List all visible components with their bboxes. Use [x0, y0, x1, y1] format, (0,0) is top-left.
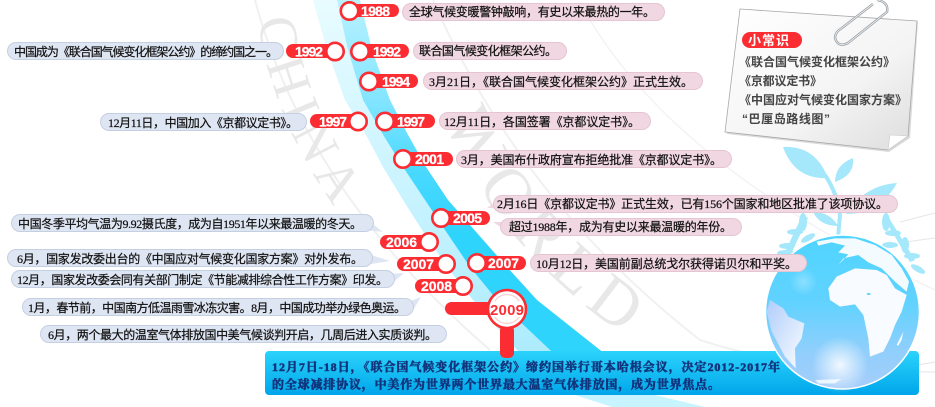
year marker: 2007 left: [397, 255, 455, 273]
callout: 2005 Kyoto in force: 2月16日《京都议定书》正式生效，已有156个国家和地区批准了该项协议。: [497, 196, 888, 211]
callout: 2005 warmest year: 超过1988年，成为有史以来最温暖的年份。: [509, 219, 732, 234]
callout: 1988 event: 全球气候变暖警钟敲响，有史以来最热的一年。: [409, 4, 655, 19]
year marker: 1997 right: [376, 113, 435, 130]
year marker: 2005: [432, 209, 490, 227]
year marker: 1988: 1988: [361, 3, 390, 19]
year marker: 2001: 2001: [415, 151, 444, 167]
callout: 2008 events: 1月，春节前，中国南方低温雨雪冰冻灾害。8月，中国成功举办绿色奥运。: [28, 300, 406, 315]
year marker: 1994: 1994: [382, 74, 410, 90]
callout: 2007 work plan: 12月，国家发改委会同有关部门制定《节能减排综合性工作方案》印发。: [17, 272, 388, 287]
callout: 2009 talks: 6月，两个最大的温室气体排放国中美气候谈判开启，几周后进入实质谈判。: [48, 327, 437, 342]
callout: 1992 world event: 联合国气候变化框架公约。: [419, 43, 557, 58]
panel: note card: [725, 0, 918, 152]
background watermark: China World: WORLD: [451, 101, 638, 326]
year marker: 1988: [341, 2, 399, 20]
timeline curved band: [313, 0, 705, 407]
year marker: 2008: 2008: [421, 278, 452, 294]
callout: 1994 event: 3月21日，《联合国气候变化框架公约》正式生效。: [429, 74, 693, 89]
callout: 2006 China winter: 中国冬季平均气温为9.92摄氏度，成为自1951年以来最温暖的冬天。: [18, 216, 362, 231]
year marker: 2006: [380, 233, 438, 251]
panel: note card: 《联合国气候变化框架公约》: [739, 54, 895, 69]
year marker: 2007 right: 2007: [488, 255, 519, 271]
year marker: 2005: 2005: [453, 210, 482, 226]
badge: tips heading: [742, 30, 802, 49]
callout: 1992 China: 中国成为《联合国气候变化框架公约》的缔约国之一。: [14, 44, 278, 59]
year marker: 1992 left: 1992: [295, 44, 323, 60]
icon: globe: [766, 235, 920, 393]
year marker: 2001: [394, 150, 453, 168]
plant above globe: [777, 147, 926, 276]
year marker: 1997 left: 1997: [319, 114, 347, 130]
background watermark: China World: [254, 0, 935, 373]
icon: paperclip: [835, 0, 887, 45]
year marker: 1992 left: [286, 43, 344, 60]
year marker: 2008: [415, 277, 472, 295]
year marker: 2006: 2006: [386, 234, 417, 250]
callout: 2007 Nobel: 10月12日，美国前副总统戈尔获得诺贝尔和平奖。: [536, 256, 797, 271]
callout: 2001 event: 3月，美国布什政府宣布拒绝批准《京都议定书》。: [461, 152, 722, 167]
year marker: 1997 left: [310, 113, 367, 130]
callout: 2007 national plan: 6月，国家发改委出台的《中国应对气候变化国家方案》对外发布。: [17, 251, 363, 266]
year marker: 1994: [360, 73, 418, 90]
panel: note card: 《中国应对气候变化国家方案》: [739, 92, 907, 107]
year marker: 2007 right: [468, 254, 526, 272]
panel: conclusion banner 2009: 12月7日-18日，《联合国气候变化框架公约》缔约国举行哥本哈根会议，决定2012-2017年: [272, 359, 780, 374]
panel: conclusion banner 2009: [265, 351, 919, 395]
panel: note card: “巴厘岛路线图”: [742, 111, 830, 126]
background watermark: China World: CHINA: [260, 18, 354, 206]
year marker: 1997 right: 1997: [397, 114, 425, 130]
year marker: 2009: [445, 290, 526, 358]
year marker: 1992 right: 1992: [373, 44, 401, 60]
callout: 1997 China: 12月11日，中国加入《京都议定书》。: [108, 115, 298, 130]
year marker: 2009: 2009: [490, 302, 524, 319]
panel: note card: 《京都议定书》: [739, 73, 822, 88]
callout: 1997 world event: 12月11日，各国签署《京都议定书》。: [444, 114, 640, 129]
panel: conclusion banner 2009: 的全球减排协议，中美作为世界两个世界最大温室气体排放国，成为世界焦点。: [272, 376, 720, 392]
year marker: 1992 right: [351, 43, 409, 60]
badge: tips heading: 小常识: [748, 30, 789, 49]
year marker: 2007 left: 2007: [403, 256, 434, 272]
